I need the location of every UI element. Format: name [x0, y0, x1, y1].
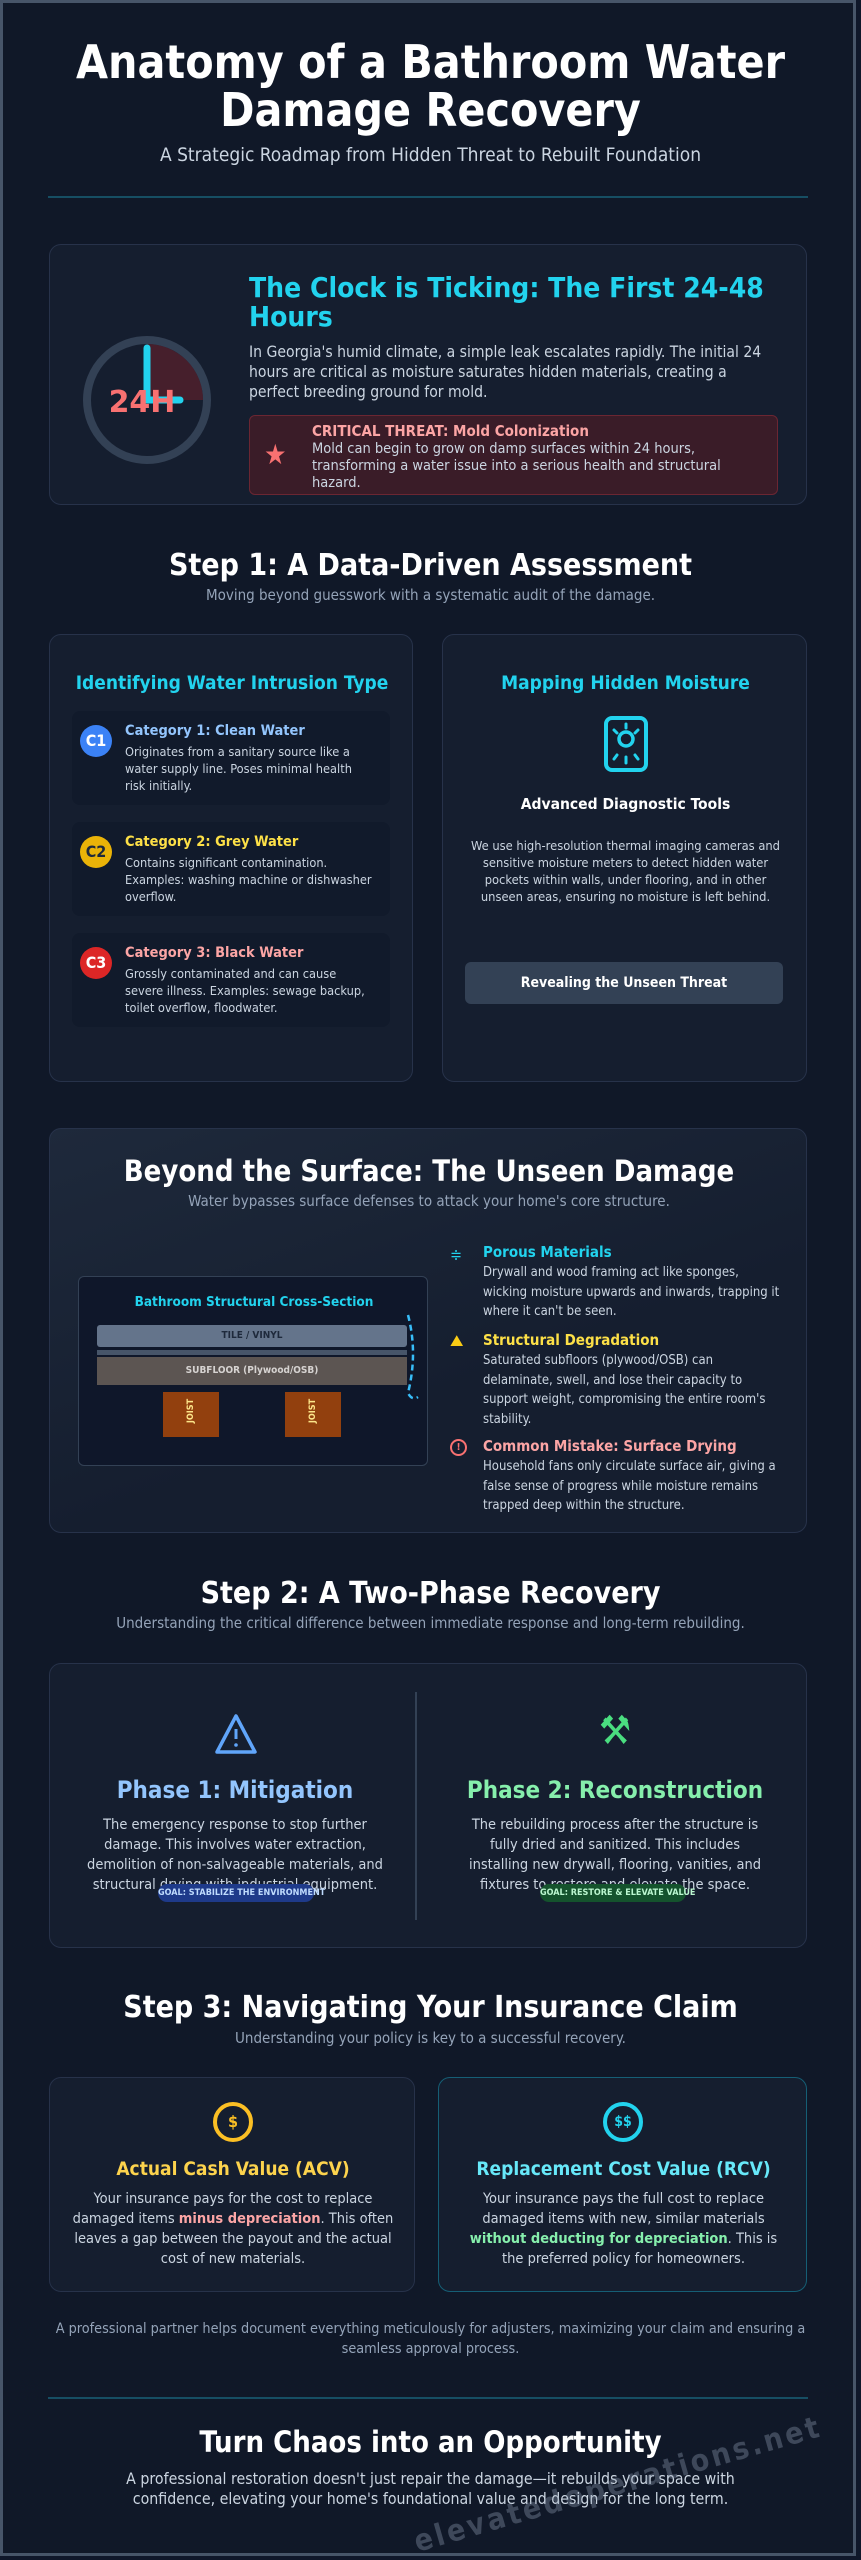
watermark: elevatedoperations.net — [410, 2410, 826, 2560]
panel: ACV: Actual Cash Value (ACV) — [116, 2158, 350, 2180]
heading: final: Turn Chaos into an Opportunity — [199, 2425, 662, 2459]
panel: hidden moisture: Mapping Hidden Moisture — [501, 672, 750, 694]
panel: hidden moisture: unseen areas, ensuring no moisture is left behind. — [481, 890, 770, 905]
category 1: C1 — [86, 731, 106, 750]
panel: two phases — [49, 1663, 807, 1948]
category 2: Contains significant contamination. — [125, 855, 327, 870]
text: final: A professional restoration doesn't just repair the damage—it rebuilds your space with confidence, elevating your home's foundational value and design for the long term. — [126, 2469, 735, 2508]
category 3: toilet overflow, floodwater. — [125, 1000, 278, 1015]
category 3: Category 3: Black Water — [125, 945, 303, 961]
panel: beyond the surface: Water bypasses surface defenses to attack your home's core structure. — [188, 1192, 670, 1210]
item: structural degradation: ⛰ — [450, 1331, 463, 1350]
phase 2 — [467, 1708, 763, 1902]
panel: ACV — [49, 2077, 415, 2292]
item: common mistake — [450, 1437, 776, 1513]
category 3: severe illness. Examples: sewage backup, — [125, 983, 365, 998]
text: Understanding your policy is key to a successful recovery. — [235, 2029, 626, 2047]
title — [76, 35, 785, 137]
panel: hidden moisture: Advanced Diagnostic Tools — [521, 795, 730, 813]
phase 1 — [87, 1714, 383, 1902]
icon: thermal camera — [604, 716, 648, 772]
item: structural degradation: Saturated subfloors (plywood/OSB) can delaminate, swell, and lose their capacity to support weight, compromising the entire room's stability. — [483, 1353, 765, 1426]
heading: clock: The Clock is Ticking: The First 24-48 Hours — [249, 271, 764, 333]
callout: critical threat — [249, 415, 778, 495]
category 2: C2 — [86, 842, 106, 861]
panel: RCV: Replacement Cost Value (RCV) — [476, 2158, 771, 2180]
panel: hidden moisture — [442, 634, 807, 1082]
category 1 — [72, 711, 390, 805]
subheading: step 1: Moving beyond guesswork with a systematic audit of the damage. — [206, 586, 655, 604]
title: Damage Recovery — [220, 83, 641, 137]
panel: beyond the surface: Beyond the Surface: The Unseen Damage — [124, 1154, 734, 1188]
title: Anatomy of a Bathroom Water — [76, 35, 785, 89]
icon: clock: 24H — [109, 385, 175, 420]
panel: RCV — [438, 2077, 807, 2292]
diagram: cross-section: SUBFLOOR (Plywood/OSB) — [186, 1365, 318, 1376]
category 3 — [72, 933, 390, 1027]
diagram: cross-section: Bathroom Structural Cross-Section — [135, 1294, 373, 1310]
icon: star: ★ — [264, 438, 287, 471]
panel: RCV: Your insurance pays the full cost to replace damaged items with new, similar materials without deducting for depreciation. This is the preferred policy for homeowners. — [470, 2191, 777, 2267]
category 1: Originates from a sanitary source like a — [125, 744, 350, 759]
icon: clock — [83, 336, 211, 464]
item: porous materials: ≑ — [450, 1245, 462, 1264]
subtitle: A Strategic Roadmap from Hidden Threat to Rebuilt Foundation — [160, 144, 701, 166]
heading: step 2: Step 2: A Two-Phase Recovery — [201, 1576, 660, 1611]
heading: step 3: Step 3: Navigating Your Insurance Claim — [123, 1990, 738, 2025]
category 1: risk initially. — [125, 778, 192, 793]
category 3: Grossly contaminated and can cause — [125, 966, 336, 981]
phase 1: Phase 1: Mitigation — [117, 1776, 353, 1804]
phase 2: Phase 2: Reconstruction — [467, 1776, 763, 1804]
category 1: water supply line. Poses minimal health — [125, 761, 352, 776]
diagram: cross-section: JOIST — [186, 1399, 196, 1423]
category 1: Category 1: Clean Water — [125, 723, 305, 739]
panel: water intrusion type: Identifying Water Intrusion Type — [76, 672, 388, 694]
callout: critical threat: CRITICAL THREAT: Mold Colonization — [312, 422, 589, 440]
diagram: cross-section: TILE / VINYL — [222, 1330, 282, 1341]
panel: ACV: Your insurance pays for the cost to replace damaged items minus depreciation. This often leaves a gap between the payout and the actual cost of new materials. — [73, 2191, 393, 2267]
panel: hidden moisture: We use high-resolution thermal imaging cameras and — [471, 839, 780, 854]
item: porous materials: Drywall and wood framing act like sponges, wicking moisture upwards and inwards, trapping it where it can't be seen. — [483, 1265, 779, 1319]
category 2: Category 2: Grey Water — [125, 834, 298, 850]
panel: hidden moisture: sensitive moisture meters to detect hidden water — [483, 856, 768, 871]
text: Understanding the critical difference between immediate response and long-term rebuilding. — [116, 1614, 745, 1632]
phase 2: ⚒ — [599, 1708, 631, 1754]
panel: beyond the surface — [49, 1128, 807, 1533]
item: common mistake: Household fans only circulate surface air, giving a false sense of progress while moisture remains trapped deep within the structure. — [483, 1459, 776, 1513]
panel: clock is ticking — [49, 244, 807, 505]
panel: ACV: $ — [228, 2112, 238, 2131]
item: porous materials: Porous Materials — [483, 1243, 612, 1261]
category 2: Examples: washing machine or dishwasher — [125, 872, 372, 887]
item: porous materials — [450, 1243, 779, 1319]
button: revealing — [465, 962, 783, 1004]
text: georgia: In Georgia's humid climate, a simple leak escalates rapidly. The initial 24 hours are critical as moisture saturates hidden materials, creating a perfect breeding ground for mold. — [249, 343, 761, 401]
phase 1: GOAL: STABILIZE THE ENVIRONMENT — [158, 1888, 325, 1898]
panel: RCV: $$ — [614, 2114, 632, 2130]
diagram: cross-section — [78, 1276, 428, 1466]
phase 2: The rebuilding process after the structure is fully dried and sanitized. This includes installing new drywall, flooring, vanities, and fixtures to restore and elevate the space. — [469, 1817, 761, 1893]
callout: critical threat: Mold can begin to grow on damp surfaces within 24 hours, transforming a water issue into a serious health and structural hazard. — [312, 441, 721, 491]
item: structural degradation: Structural Degradation — [483, 1331, 659, 1349]
phase 2: GOAL: RESTORE & ELEVATE VALUE — [540, 1888, 695, 1898]
button: revealing: Revealing the Unseen Threat — [521, 975, 727, 991]
item: common mistake: ! — [456, 1442, 461, 1453]
panel: hidden moisture: pockets within walls, under flooring, and in other — [485, 873, 766, 888]
panel: water intrusion type — [49, 634, 413, 1082]
category 3: C3 — [86, 953, 106, 972]
category 2: overflow. — [125, 889, 176, 904]
heading: step 1: Step 1: A Data-Driven Assessment — [169, 548, 692, 583]
text: partner note: A professional partner helps document everything meticulously for adjusters, maximizing your claim and ensuring a seamless approval process. — [56, 2321, 805, 2357]
category 2 — [72, 822, 390, 916]
phase 1: The emergency response to stop further damage. This involves water extraction, demolition of non-salvageable materials, and structural drying with industrial equipment. — [87, 1817, 383, 1893]
diagram: cross-section: JOIST — [308, 1399, 318, 1423]
item: structural degradation — [450, 1331, 765, 1426]
item: common mistake: Common Mistake: Surface Drying — [483, 1437, 737, 1455]
